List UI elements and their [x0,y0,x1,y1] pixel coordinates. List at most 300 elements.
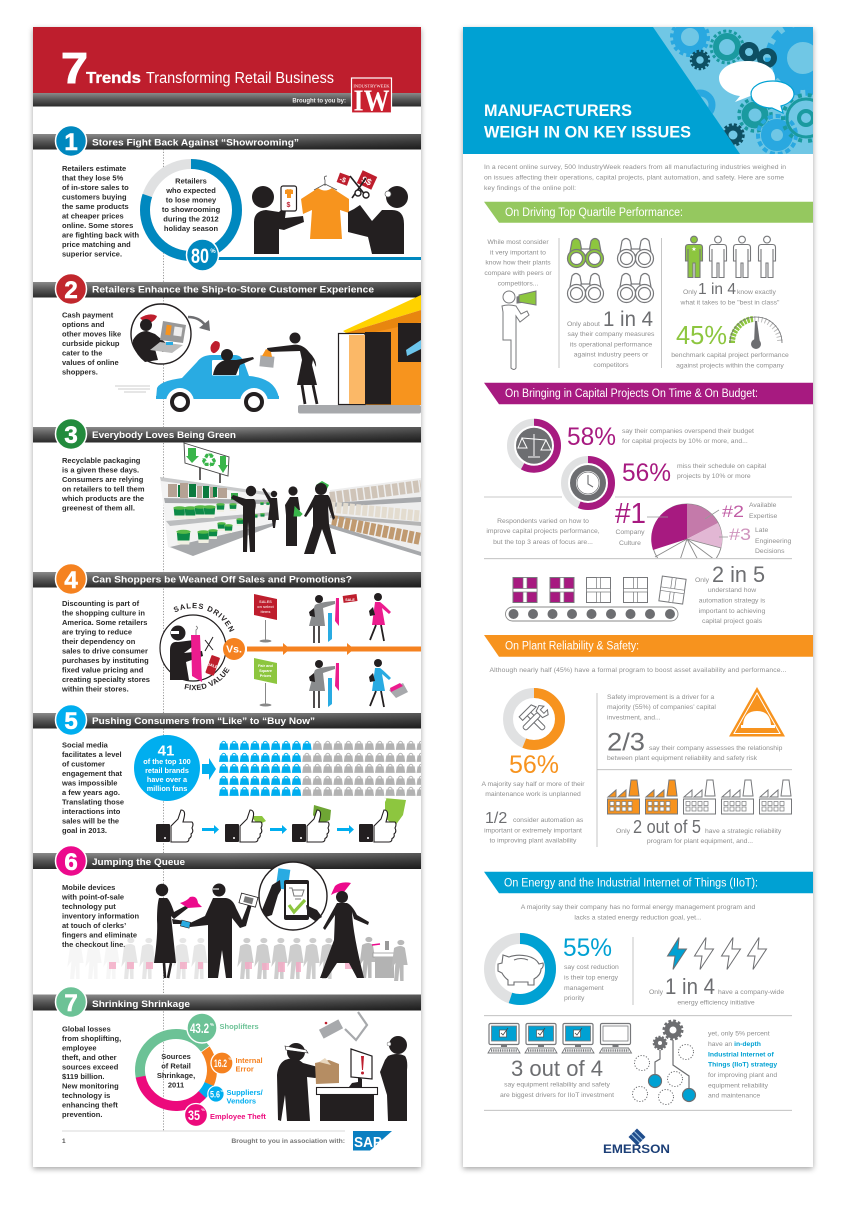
donut: 80 percent: to showrooming [162,205,221,214]
body text: that they lose 5% [62,174,124,182]
intro text: In a recent online survey, 500 IndustryWeek readers from all manufacturing industries weighed in [484,164,786,171]
sign: fair and square prices [254,658,277,706]
body text: other moves like [62,330,121,338]
donut: sources of retail shrinkage: of Retail [161,1062,191,1070]
body text: options and [62,320,105,329]
stat: 56 percent [481,751,585,798]
body text: of customer [62,760,105,768]
caption: benchmark: benchmark capital project performance [671,352,789,359]
arrow: to bag grid [202,758,216,780]
body text: inventory information [62,912,140,920]
stat: 1 in 4 best in class: what it takes to be "best in class" [680,300,780,306]
pictogram: people 1 of 4: ★ [691,246,697,253]
stat: 2 out of 5: 2 out of 5 [633,816,701,837]
body text: sales will be the [62,816,119,826]
section: capital projects [484,383,813,625]
illustration: green aisle sign: ♻ [200,450,218,472]
stat: 1 in 4 measure [567,307,655,369]
illustration: right shelves [328,478,421,556]
body text: facilitates a level [62,750,122,759]
sign: sales on select items: items [261,610,270,614]
body text: shoppers. [62,368,98,376]
body text: Cash payment [62,310,114,320]
sign: fair and square prices: Prices [260,674,271,678]
heading: 3 [64,422,78,449]
stat: 2 in 5: understand how [708,587,756,594]
label: shoplifters: Shoplifters [220,1022,259,1031]
illustration: shoppers in the aisle [231,481,336,554]
text: in-depth IIoT strategy: Industrial Internet of [708,1051,774,1058]
heading [33,704,421,736]
brought to you by: Brought to you by: [292,98,346,104]
label: suppliers and vendors: Vendors [226,1096,256,1106]
footer [62,1131,392,1151]
stat: 3 out of 4: 3 out of 4 [511,1056,603,1081]
banner: On Bringing in Capital Projects On Time & On Budget: [505,388,758,400]
heading: Everybody Loves Being Green [92,430,236,441]
stat: 2/3 [607,729,783,762]
heading [33,418,421,450]
label: internal error: % [228,1057,232,1061]
callout: 41 of top 100 brands: retail brands [145,766,189,775]
icon: hard hat warning [729,687,785,736]
heading [33,986,421,1018]
text: in-depth IIoT strategy: yet, only 5% percent [708,1031,770,1038]
pictogram: 41 of 100 shopping bags [219,741,426,796]
stat: 56 percent: miss their schedule on capital [677,463,767,470]
title [62,52,334,86]
label: internal error: 16.2 [214,1058,227,1070]
section 3: going green [33,418,421,556]
body text: New monitoring [62,1082,119,1090]
heading: 6 [64,849,78,876]
sign: fair and square prices: Square [259,669,272,673]
body text: customers buying [62,192,127,202]
stat: 45 percent: 45% [676,320,727,350]
banner [484,202,813,223]
body text: the checkout line. [62,940,125,949]
text: respondents varied: but the top 3 areas of focus are... [493,539,593,546]
illustration: thief with box [277,1043,339,1121]
illustration: clerk with mobile device helping customer [154,884,258,978]
label: #3 late engineering decisions: #3 [729,525,751,544]
stat: 56 percent: projects by 10% or more [677,473,751,480]
body text: of in-store sales to [62,183,129,192]
text: in-depth IIoT strategy: for improving plant and [708,1072,777,1079]
stat: 3 out of 4: say equipment reliability and safety [504,1082,610,1089]
badge: sales driven vs fixed value: SALE [207,661,219,670]
callout: 41 of top 100 brands: of the top 100 [143,757,191,766]
section 1: showrooming [33,126,421,271]
text: safety improvement: Safety improvement is a driver for a [607,694,714,701]
donut: 55 percent [490,938,550,1000]
text: respondents varied: improve capital projects performance, [486,528,600,535]
body text: Mobile devices [62,883,115,892]
donut: 80 percent [145,164,421,271]
red title banner [33,27,421,118]
title: 7 [61,44,88,93]
stat: 2/3: 2/3 [607,729,645,757]
body text: on retailers to tell them [62,484,145,494]
body text: with point-of-sale [61,892,124,902]
icon: piggy bank [498,955,543,985]
body text: price matching and [62,240,131,249]
text: in-depth IIoT strategy: have an in-depth [708,1041,761,1048]
heading [33,126,421,156]
body text: the same products [62,202,129,211]
section: top quartile performance [484,202,813,370]
heading [33,564,421,594]
label: #3 late engineering decisions: Decisions [755,548,785,555]
inset: online ordering [131,304,191,364]
sign: sales on select items [254,594,277,642]
lead-in text: lacks a stated energy reduction goal, yet... [574,915,702,922]
SAP logo: SAP [354,1135,382,1151]
stat: 2 out of 5: Only [616,828,631,835]
stat: 55 percent [563,934,619,1002]
heading: Retailers Enhance the Ship-to-Store Customer Experience [92,284,374,296]
illustration: customer leaving with hat [320,882,369,978]
label: internal error: Error [236,1064,254,1074]
body text: Retailers estimate [62,164,126,173]
badge: sales driven vs fixed value: SALES DRIVEN [174,602,234,632]
text: safety improvement: majority (55%) of companies’ capital [607,704,716,711]
heading: 1 [64,129,78,156]
sequence: thumbs up growing money [156,798,406,842]
stat: 1/2 automation: important or extremely important [484,828,582,835]
pie: top 3 areas of focus [651,504,722,574]
donut: sources of retail shrinkage: 2011 [168,1080,184,1090]
body text: Social media [62,740,109,750]
donut: 80 percent: holiday season [164,224,219,233]
body text: online. Some stores [62,221,133,230]
illustration: green aisle sign [184,443,229,483]
donut: 80 percent: during the 2012 [163,214,219,224]
heading [33,846,421,876]
SAP logo [353,1131,392,1151]
body text: Consumers are relying [62,475,144,484]
label: #1 company culture [615,498,668,547]
pictogram: factories 2 of 5 [608,780,792,814]
intro text: key findings of the online poll: [484,185,576,192]
label: #2 available expertise: #2 [722,502,744,521]
shoppers: sales driven: SALE [345,598,355,602]
heading: Can Shoppers be Weaned Off Sales and Promotions? [92,574,352,586]
donut: 80 percent: who expected [165,186,216,195]
stat: 56 percent: 56% [622,459,671,487]
donut: 58 percent over budget [510,422,558,469]
banner: On Driving Top Quartile Performance: [505,207,683,219]
illustration: shopper with phone and retailer cutting prices: -$ [338,176,347,185]
heading: Shrinking Shrinkage [92,999,190,1010]
stat: 2 out of 5: have a strategic reliability [705,828,782,835]
stat: 1 in 4 measure: say their company measures [568,331,655,338]
stat: 56 percent: maintenance work is unplanned [485,791,581,798]
heading: Jumping the Queue [92,857,185,868]
IndustryWeek logo: INDUSTRYWEEK [353,84,390,88]
lead-in text: Although nearly half (45%) have a formal program to boost asset availability and performance... [490,667,787,674]
heading: Stores Fight Back Against “Showrooming” [92,138,299,148]
body text: fingers and eliminate [62,930,137,940]
stat: 1/2 automation [484,810,584,845]
label: employee theft: Employee Theft [210,1112,266,1121]
callout: 41 of top 100 brands [134,735,200,801]
stat: 1 in 4: have a company-wide [718,989,784,996]
panel: 7 trends transforming retail business [33,27,421,1167]
stat: 1 in 4: 1 in 4 [665,974,715,999]
stat: 1 in 4 measure: Only about [567,321,600,328]
banner: On Energy and the Industrial Internet of Things (IIoT): [504,878,758,890]
text: in-depth IIoT strategy: equipment reliability [708,1082,769,1089]
stat: 55 percent: 55% [563,934,612,962]
stat: 55 percent: management [564,985,604,992]
donut: 80 percent: 80 [191,245,209,268]
stat: 1/2 automation: consider automation as [513,817,584,824]
body text: theft, and other [62,1053,117,1062]
body text: superior service. [62,250,122,258]
section 5: like to buy now [33,704,426,842]
title: WEIGH IN ON KEY ISSUES [484,122,691,142]
label: #1 company culture: #1 [615,498,646,530]
donut: 80 percent: Retailers [175,176,207,186]
heading: Pushing Consumers from “Like” to “Buy Now” [92,716,315,727]
body text: was impossible [61,778,117,788]
body text: technology put [62,902,116,911]
label: #1 company culture: Culture [619,540,641,547]
donut: 80 percent: % [210,249,216,255]
body text: curbside pickup [62,339,120,348]
label: #3 late engineering decisions: Engineering [755,538,791,545]
label: #2 available expertise [705,502,778,521]
label: #2 available expertise: Expertise [749,513,778,520]
banner [484,635,813,657]
body text: from shoplifting, [62,1034,121,1043]
stat: 55 percent: is their top energy [564,974,619,982]
body text: engagement that [62,769,123,778]
body text: is a given these days. [62,466,139,474]
lead-in text: compare with peers or [484,270,552,277]
stat: 1 in 4 best in class [680,281,780,306]
banner [484,383,813,404]
caption: benchmark: against projects within the company [676,362,784,370]
pictogram: conveyor with boxes [506,576,686,621]
illustration: store front [338,295,421,405]
body text: values of online [62,358,119,367]
stat: 2 in 5: 2 in 5 [712,562,765,587]
shoppers: sales driven [309,593,391,643]
label: suppliers and vendors [208,1086,264,1106]
pictogram: lightning bolts 1 of 4 [668,938,766,970]
stat: 58 percent: for capital projects by 10% or more, and... [622,438,748,445]
body text: Recyclable packaging [62,456,141,465]
label: shoplifters [187,1013,259,1043]
donut: sources of retail shrinkage: Shrinkage, [157,1071,195,1080]
intro text: on issues affecting their operations, capital projects, plant automation, and safety. Here are some [484,174,784,182]
stat: 1 in 4 best in class: 1 in 4 [698,281,736,298]
stat: 1/2 automation: to improving plant availability [490,838,577,845]
dotted centre line [163,150,164,1130]
donut: 56 percent behind schedule [564,460,612,506]
stat: 1 in 4 best in class: Only [683,289,698,296]
banner [484,872,813,893]
body text: sources exceed [62,1062,119,1072]
stat: 1 in 4 measure: against industry peers or [574,352,649,359]
arrow: order to pickup [188,317,210,331]
lead-in text: it very important to [490,249,546,256]
callout: 41 of top 100 brands: have over a [147,775,188,784]
pictogram: people 1 of 4 [686,236,776,278]
stat: 2 in 5: capital project goals [702,618,763,625]
section: plant reliability and safety [481,635,813,847]
label: internal error: Internal [236,1056,263,1065]
body text: within their stores. [61,684,129,694]
pictogram: binoculars 1 of 4 [568,238,654,302]
section 7: shrinkage [33,986,421,1126]
text: in-depth IIoT strategy: Things (IIoT) strategy [708,1062,777,1069]
stat: 56 percent [622,459,767,487]
body text: employee [62,1044,97,1052]
body text: interactions into [62,807,121,816]
panel: manufacturers weigh in on key issues [463,19,837,1167]
stat: 2/3: between plant equipment reliability and safety risk [607,755,758,762]
sign: sales on select items: on select [257,605,274,609]
body text: a few years ago. [62,788,120,797]
label: #3 late engineering decisions: Late [755,527,768,534]
stat: 1 in 4: Only [649,989,664,996]
IndustryWeek logo: IW [354,82,390,118]
vs badge [223,638,245,660]
stat: 3 out of 4: are biggest drivers for IIoT investment [500,1092,614,1099]
stat: 1 in 4 measure: its operational performance [570,341,652,348]
body text: sales to drive consumer [62,646,148,656]
pictogram: monitors 3 of 4 [488,1024,632,1053]
body text: greenest of them all. [62,504,135,512]
label: #1 company culture: Company [615,529,645,536]
stat: 55 percent: say cost reduction [564,964,619,971]
footer: 1 [62,1138,66,1145]
stat: 1 in 4 best in class: know exactly [737,289,777,296]
illustration: security camera [319,1012,367,1040]
stat: 58 percent: 58% [567,423,616,451]
callout: 41 of top 100 brands: 41 [158,742,174,760]
lead-in text: know how their plants [485,260,551,266]
donut: 56 percent unplanned [508,693,560,745]
title: Transforming Retail Business [146,70,334,87]
timeline arrows [247,643,421,655]
callout: 41 of top 100 brands: million fans [147,784,187,793]
heading: 4 [64,567,78,594]
body text: the shopping culture in [62,608,145,618]
body text: prevention. [62,1110,102,1119]
sign: sales on select items: SALES [259,600,272,604]
body text: goal in 2013. [62,826,107,835]
body text: which products are the [61,494,144,503]
body text: purchases by instituting [62,656,149,665]
heading: 2 [64,277,78,304]
section 4: sales and promotions [33,564,421,708]
inset: mobile checkout phone [259,862,327,930]
icon: person with megaphone [502,291,536,370]
stat: 58 percent [567,423,754,451]
badge: sales driven vs fixed value [159,602,234,690]
label: employee theft [184,1104,266,1126]
text: safety improvement: investment, and... [607,715,661,722]
icon: gauge [730,317,782,349]
stat: 1 in 4 [649,974,784,1006]
stat: 2 in 5: important to achieving [699,608,765,615]
section: energy and IIoT [484,872,813,1110]
text: respondents varied: Respondents varied on how to [497,518,589,525]
illustration: car at curbside pickup [115,332,421,416]
badge: sales driven vs fixed value: FIXED VALUE [184,667,230,690]
body text: Discounting is part of [62,599,140,608]
label: suppliers and vendors: % [221,1089,224,1093]
stat: 2 out of 5 [616,816,782,845]
stat: 2 in 5 [695,562,766,625]
body text: enhancing theft [62,1100,118,1110]
illustration: shopper with phone and retailer cutting prices: $$ [360,174,373,188]
stat: 56 percent: A majority say half or more of their [481,781,585,788]
stat: 2/3: say their company assesses the relationship [649,745,783,752]
donut: sources of retail shrinkage: Sources [161,1052,191,1061]
icon: gear circuit [632,1021,696,1104]
Emerson logo [603,1129,670,1156]
title: Trends [86,70,141,87]
donut: sources of retail shrinkage [125,1013,266,1126]
banner: On Plant Reliability & Safety: [505,640,639,652]
body text: cater to the [62,348,102,358]
body text: at touch of clerks’ [62,921,126,930]
title: MANUFACTURERS [484,101,632,120]
label: suppliers and vendors: 5.6 [210,1090,220,1100]
body text: $119 billion. [62,1072,105,1081]
label: shoplifters: % [210,1022,214,1027]
body text: are fighting back with [62,230,140,240]
body text: their dependency on [62,637,136,646]
stat: 58 percent: say their companies overspend their budget [622,428,754,435]
stat: 2 out of 5: program for plant equipment, and... [647,838,753,845]
stat: 1 in 4 measure: competitors [593,362,629,369]
donut: 80 percent: to lose money [166,196,217,204]
body text: are trying to reduce [62,628,132,636]
body text: at cheaper prices [62,212,124,220]
stat: 1 in 4: energy efficiency initiative [677,1000,755,1006]
label: suppliers and vendors: Suppliers/ [226,1088,264,1097]
lead-in text: While most consider [487,239,549,246]
stat: 56 percent: 56% [509,751,559,779]
sign: fair and square prices: Fair and [258,664,274,668]
stat: 3 out of 4 [500,1056,614,1099]
body text: America. Some retailers [62,618,147,627]
stat: 55 percent: priority [564,995,585,1002]
Emerson logo: EMERSON [603,1144,670,1156]
body text: fixed value pricing and [62,666,144,674]
illustration: faded checkout queue [67,937,408,981]
footer: Brought to you in association with: [231,1138,345,1145]
text: in-depth IIoT strategy: and maintenance [708,1093,760,1100]
label: #3 late engineering decisions [719,525,791,555]
body text: creating specialty stores [62,675,150,684]
section 2: ship-to-store [33,274,421,416]
vs badge: Vs. [226,644,242,656]
body text: Translating those [62,798,124,806]
label: shoplifters: 43.2 [190,1020,209,1036]
heading: 5 [64,708,78,735]
section 6: jumping the queue [33,846,421,981]
illustration: guard at monitor desk [316,1036,407,1121]
stat: 2 in 5: Only [695,577,710,584]
label: employee theft: % [201,1107,205,1112]
